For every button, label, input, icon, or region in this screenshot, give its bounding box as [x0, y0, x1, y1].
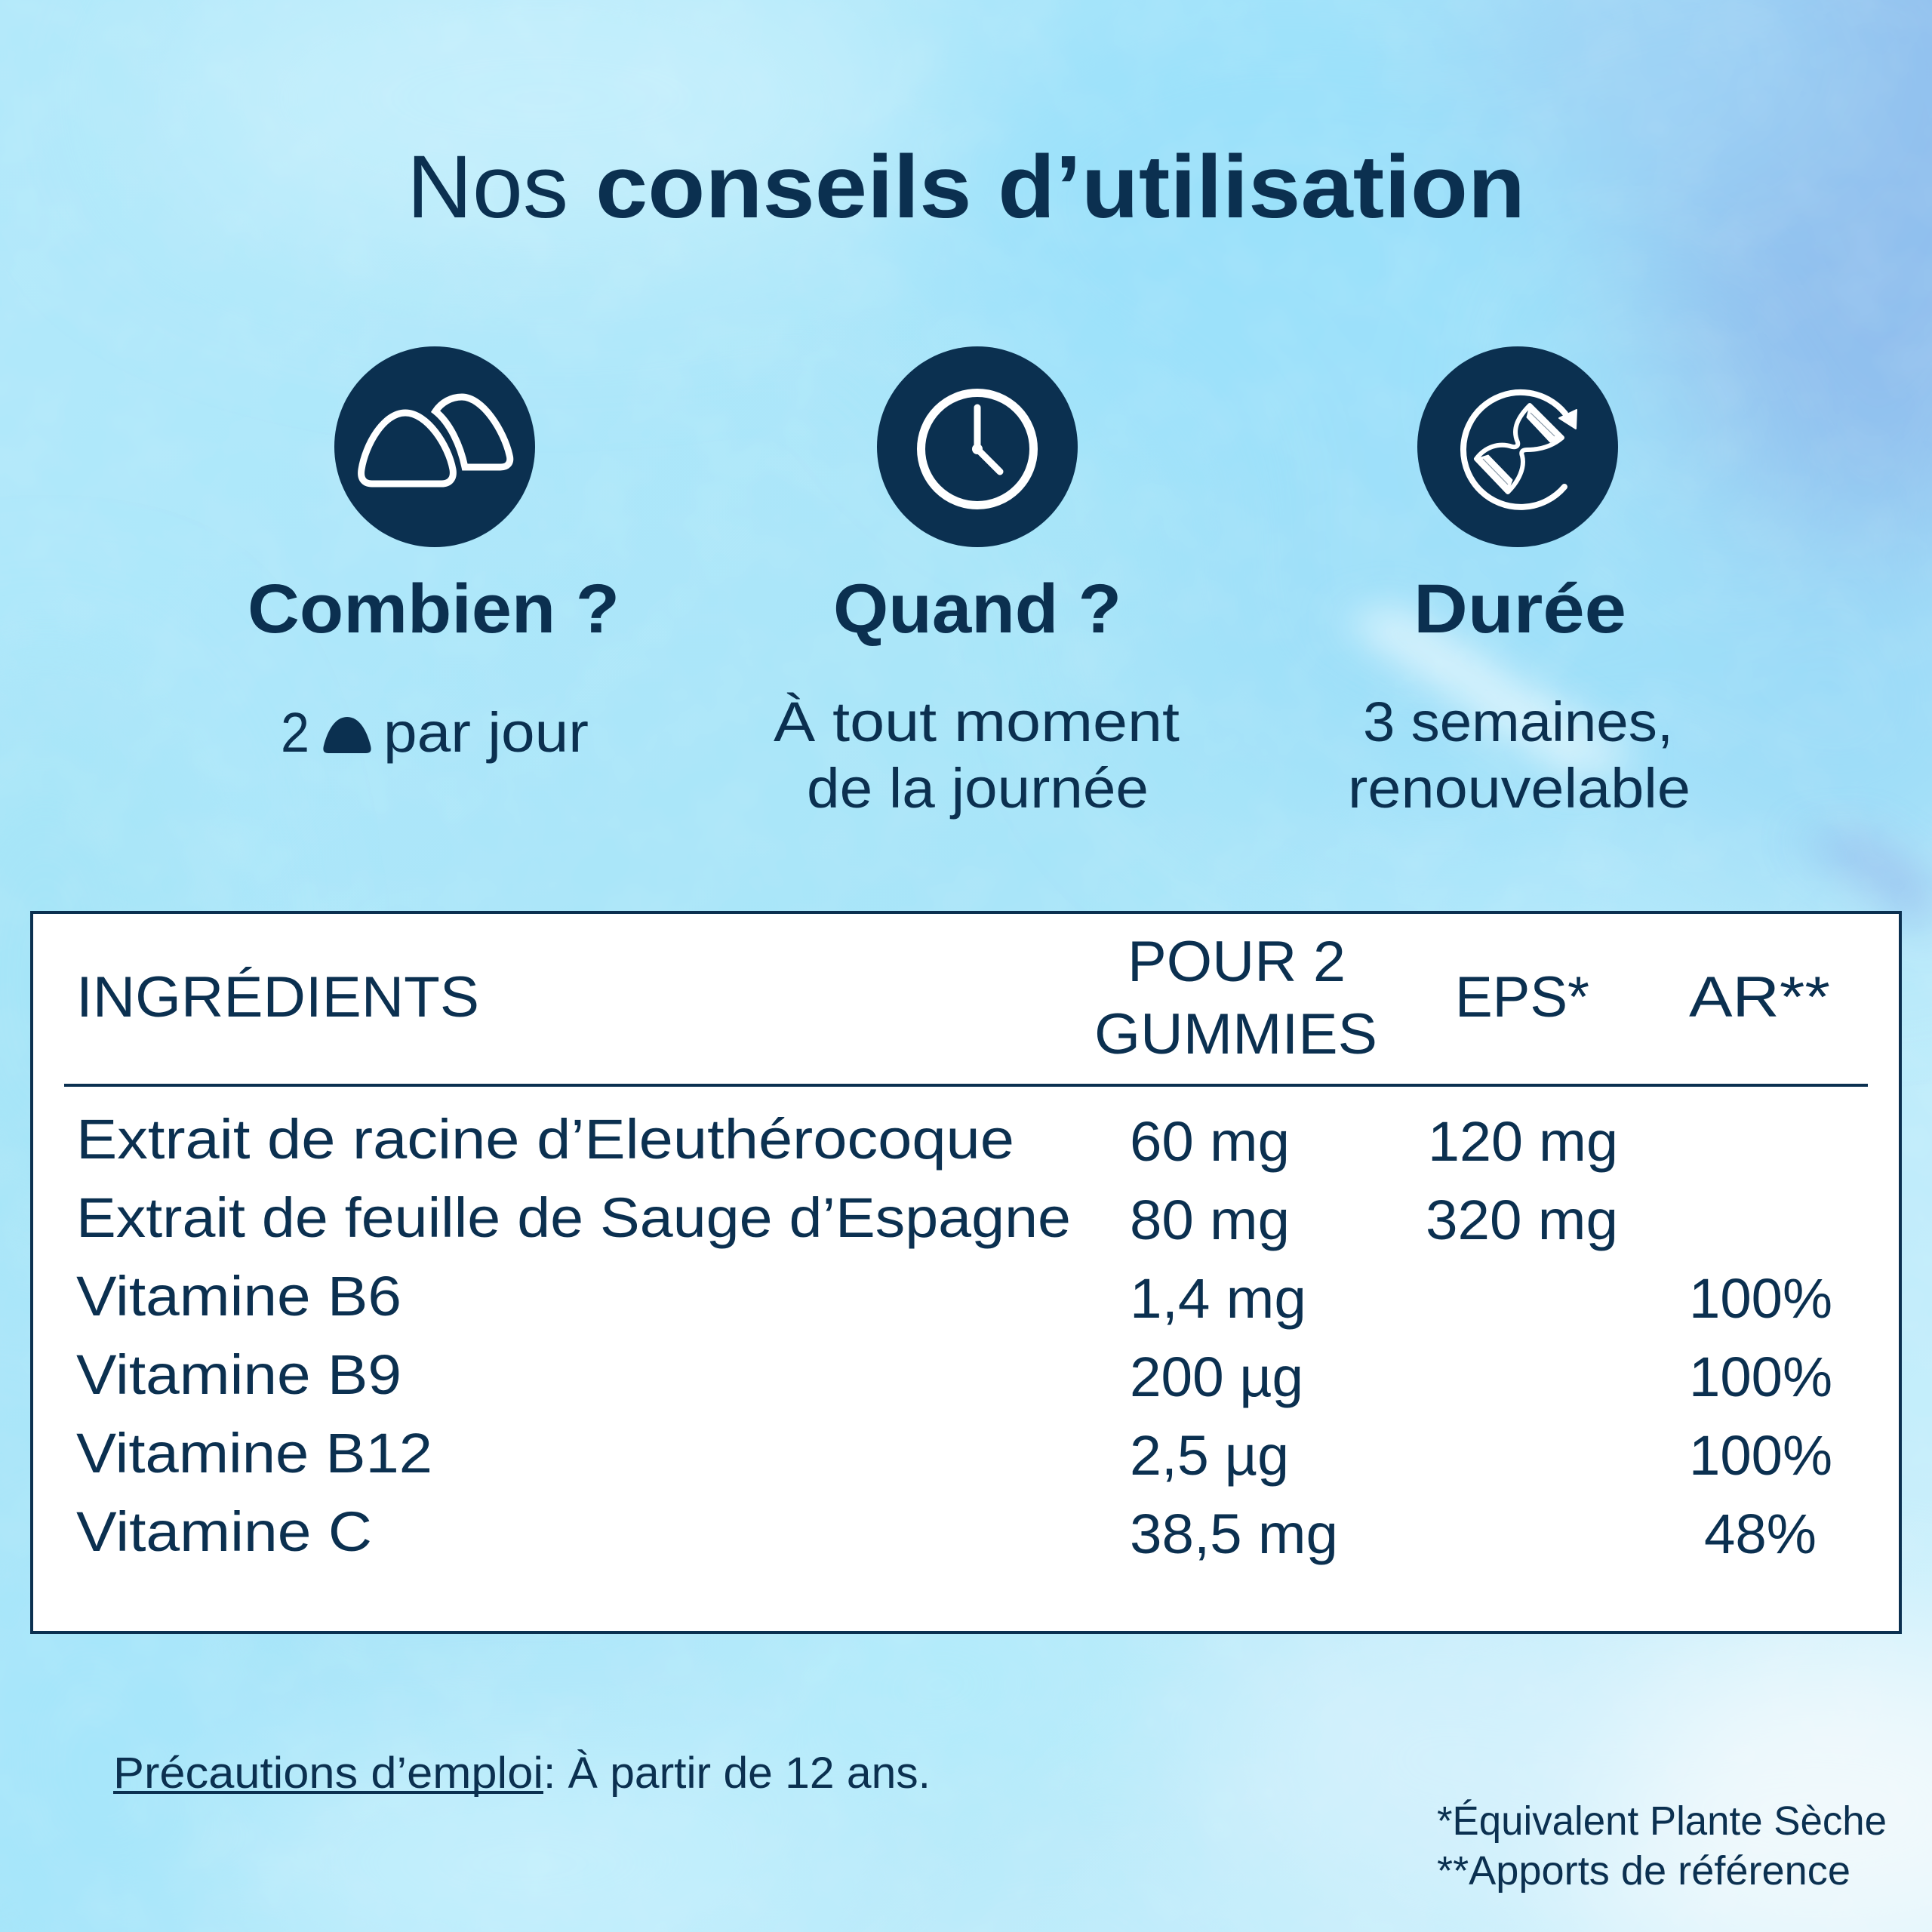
- eps values: 320 mg: [1426, 1189, 1618, 1251]
- amounts per 2 gummies: 60 mg: [1130, 1110, 1290, 1173]
- text: 3 semaines: [1348, 691, 1690, 820]
- table header: POUR 2: [1128, 930, 1346, 994]
- ar values: 100%: [1689, 1346, 1832, 1408]
- text: 3 semaines: renouvelable: [1348, 757, 1690, 820]
- ingredient names: Vitamine B12: [76, 1422, 432, 1484]
- icon: clock: [877, 346, 1078, 547]
- precautions note: : À partir de 12 ans.: [543, 1749, 931, 1798]
- column: duree: [1348, 346, 1690, 820]
- text: par jour: par jour: [383, 701, 589, 764]
- ingredient names: Vitamine C: [76, 1500, 372, 1563]
- ingredient names: [76, 1108, 1071, 1563]
- text: 3 semaines: 3 semaines,: [1363, 691, 1673, 753]
- eps values: 120 mg: [1428, 1110, 1618, 1173]
- icon: hourglass cycle: [1417, 346, 1618, 547]
- text: a tout moment: À tout moment: [774, 691, 1180, 753]
- table header: EPS*: [1455, 965, 1589, 1029]
- ingredient names: Vitamine B6: [76, 1265, 401, 1327]
- amounts per 2 gummies: [1130, 1110, 1338, 1565]
- heading: quand: Quand ?: [833, 571, 1121, 648]
- icon: gummies: [334, 346, 535, 547]
- heading: combien: Combien ?: [248, 571, 620, 648]
- column: combien: [248, 346, 620, 764]
- ar values: [1689, 1267, 1832, 1565]
- footnotes: *Équivalent Plante Sèche: [1437, 1798, 1887, 1844]
- amounts per 2 gummies: 38,5 mg: [1130, 1503, 1338, 1565]
- table header: [76, 930, 1830, 1066]
- ar values: 100%: [1689, 1424, 1832, 1487]
- amounts per 2 gummies: 80 mg: [1130, 1189, 1290, 1251]
- ingredient names: Vitamine B9: [76, 1343, 401, 1406]
- ar values: 100%: [1689, 1267, 1832, 1330]
- ingredient names: Extrait de racine d’Eleuthérocoque: [76, 1108, 1014, 1171]
- table header: INGRÉDIENTS: [76, 965, 479, 1029]
- table header: AR**: [1689, 965, 1830, 1029]
- footnotes: **Apports de référence: [1437, 1848, 1850, 1894]
- column: quand: [774, 346, 1180, 820]
- amounts per 2 gummies: 1,4 mg: [1130, 1267, 1306, 1330]
- amounts per 2 gummies: 2,5 µg: [1130, 1424, 1289, 1487]
- table header: GUMMIES: [1094, 1002, 1377, 1066]
- text: par jour: 2: [281, 701, 309, 764]
- text: par jour: [281, 701, 589, 764]
- text: a tout moment: de la journée: [807, 757, 1149, 820]
- footnotes: [1437, 1798, 1887, 1894]
- heading: duree: Durée: [1414, 571, 1626, 648]
- title: Nos: [407, 137, 568, 237]
- precautions note: [113, 1749, 931, 1798]
- ingredient names: Extrait de feuille de Sauge d’Espagne: [76, 1186, 1071, 1249]
- icon: small gummy: [323, 717, 371, 753]
- panel: ingredients table: [32, 912, 1900, 1632]
- text: a tout moment: [774, 691, 1180, 820]
- title: conseils d’utilisation: [595, 137, 1525, 237]
- precautions note: Précautions d’emploi: [113, 1749, 543, 1798]
- amounts per 2 gummies: 200 µg: [1130, 1346, 1303, 1408]
- eps values: [1426, 1110, 1618, 1251]
- ar values: 48%: [1704, 1503, 1817, 1565]
